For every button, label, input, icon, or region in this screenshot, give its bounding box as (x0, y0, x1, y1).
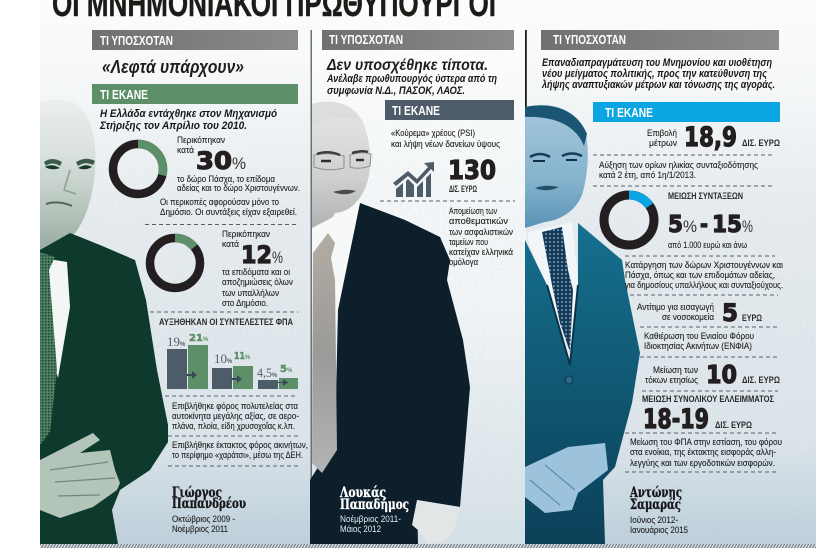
luxury tax note: αυτοκίνητα μεγάλης αξίας, σε αερο- (172, 411, 299, 422)
ENFIA note (644, 331, 754, 352)
icon: rising chart (393, 162, 434, 197)
name: Papandreou: Γιώργος (172, 485, 222, 501)
stat 30 percent: Περικόπηκαν (177, 135, 225, 146)
stat 18.9 billion (647, 122, 780, 153)
luxury tax note (172, 401, 299, 432)
tax cuts note: στα ενοίκια, της έκτακτης εισφοράς αλλη- (630, 447, 776, 458)
stat pension cuts: 5 (668, 212, 683, 238)
stat deficit cut: 18-19 (643, 404, 709, 435)
name: Papandreou: Νοέμβριος 2011 (172, 524, 228, 535)
stat 130 billion: ΔΙΣ. ΕΥΡΩ (449, 183, 477, 194)
stat 12 percent: των υπαλλήλων (222, 288, 279, 299)
promise statement: νέου μείγματος πολιτικής, προς την κατεύθυνση της (542, 68, 767, 80)
stat deficit cut: ΜΕΙΩΣΗ ΣΥΝΟΛΙΚΟΥ ΕΛΛΕΙΜΜΑΤΟΣ (642, 393, 774, 404)
stat 30 percent: κατά (177, 145, 194, 156)
name: Papandreou (172, 485, 246, 535)
property tax note: Επιβλήθηκε έκτακτος φόρος ακινήτων, (172, 440, 308, 451)
luxury tax note: πλάνα, πλοία, είδη χρυσοχοΐας κ.λπ. (172, 421, 295, 432)
pension funds note: των ασφαλιστικών (449, 227, 513, 238)
pension funds note: Απομείωση των (449, 206, 497, 217)
VAT chart heading: ΑΥΞΗΘΗΚΑΝ ΟΙ ΣΥΝΤΕΛΕΣΤΕΣ ΦΠΑ (159, 316, 293, 327)
promise statement: Επαναδιαπραγμάτευση του Μνημονίου και υιοθέτηση (542, 57, 772, 69)
portrait: Antonis Samaras (525, 105, 640, 544)
PSI text (391, 128, 500, 150)
bar chart: VAT rates: % (227, 359, 233, 365)
name: Samaras: Ιούνιος 2012- (630, 515, 678, 526)
promise statement (326, 57, 497, 97)
column rules (310, 30, 527, 544)
did header (92, 84, 298, 104)
stat pension cuts: 15 (712, 212, 742, 238)
name: Papadimos: Μάιος 2012 (340, 524, 381, 535)
bar chart: VAT rates: % (287, 368, 293, 374)
stat 30 percent: Οι περικοπές αφορούσαν μόνο το (160, 197, 279, 208)
stat pension cuts: - (700, 212, 708, 238)
pension funds note: ταμείων που (449, 237, 488, 248)
stat 12 percent: τα επιδόματα και οι (222, 267, 290, 278)
pension funds note: ομόλογα (449, 257, 478, 268)
bar chart: VAT rates: % (180, 342, 186, 348)
bar chart: VAT rates (167, 333, 298, 389)
PSI text: «Κούρεμα» χρέους (PSI) (391, 128, 475, 139)
stat deficit cut (642, 393, 774, 435)
bar chart: VAT rates: 5 (280, 364, 287, 375)
stat pension cuts: από 1.000 ευρώ και άνω (668, 240, 747, 251)
stat 30 percent: αδείας και το δώρο Χριστουγέννων. (177, 183, 300, 194)
bonuses note: Πάσχα, όπως και των επιδομάτων αδείας, (625, 270, 775, 281)
stat interest cut: 10 (706, 360, 737, 389)
name: Papandreou: Οκτώβριος 2009 - (172, 514, 235, 525)
ENFIA note: Ιδιοκτησίας Ακινήτων (ΕΝΦΙΑ) (644, 341, 752, 352)
promise statement: συμφωνία Ν.Δ., ΠΑΣΟΚ, ΛΑΟΣ. (327, 85, 465, 97)
stat hospital fee: Αντίτιμο για εισαγωγή (637, 302, 714, 313)
stat pension cuts: % (742, 217, 753, 236)
portrait: Loukas Papadimos (310, 102, 470, 545)
pension funds note (449, 206, 513, 268)
did header (593, 102, 780, 122)
stat hospital fee: 5 (722, 299, 738, 327)
did header: ΤΙ ΕΚΑΝΕ (392, 104, 440, 118)
bailout statement: Στήριξης τον Απρίλιο του 2010. (99, 120, 247, 132)
name: Samaras (629, 485, 688, 536)
stat interest cut (645, 360, 780, 389)
stat interest cut: Μείωση των (653, 365, 698, 376)
stat 12 percent: % (272, 248, 283, 267)
promised header (541, 30, 779, 50)
stat hospital fee: ΕΥΡΩ (742, 312, 762, 323)
name: Papadimos: Λουκάς (339, 485, 386, 501)
property tax note: το περίφημο «χαράτσι», μέσω της ΔΕΗ. (172, 450, 303, 461)
portrait: Giorgos Papandreou (40, 100, 168, 544)
name: Samaras: Ιανουάριος 2015 (630, 525, 688, 536)
bar chart: VAT rates: 10 (214, 351, 227, 366)
name: Samaras: Σαμαράς (630, 497, 681, 513)
property tax note (172, 440, 308, 461)
did header: ΤΙ ΕΚΑΝΕ (605, 106, 653, 120)
ENFIA note: Καθιέρωση του Ενιαίου Φόρου (644, 331, 754, 342)
bailout statement (99, 108, 277, 132)
name: Papadimos: Νοέμβριος 2011- (340, 514, 401, 525)
stat hospital fee: σε νοσοκομεία (662, 312, 714, 323)
donut 12 percent (150, 238, 200, 288)
bar chart: VAT rates: 4,5 (257, 365, 272, 380)
panel: Samaras column (541, 30, 783, 536)
luxury tax note: Επιβλήθηκε φόρος πολυτελείας στα (172, 401, 298, 412)
pension funds note: κατείχαν ελληνικά (449, 247, 513, 258)
promised header (322, 30, 514, 50)
panel: Papadimos column (322, 30, 515, 268)
retirement age note: Αύξηση των ορίων ηλικίας συνταξιοδότησης (599, 160, 758, 171)
stat 30 percent: Δημόσιο. Οι συντάξεις είχαν εξαιρεθεί. (160, 207, 297, 218)
bar chart: VAT rates: 11 (234, 351, 245, 362)
tax cuts note (630, 437, 782, 469)
stat pension cuts: ΜΕΙΩΣΗ ΣΥΝΤΑΞΕΩΝ (668, 190, 743, 201)
promised header: ΤΙ ΥΠΟΣΧΟΤΑΝ (329, 33, 403, 47)
bailout statement: Η Ελλάδα εντάχθηκε στον Μηχανισμό (100, 108, 277, 120)
stat 12 percent: Περικόπηκαν (222, 229, 270, 240)
promised header (92, 30, 298, 50)
stat 12 percent: κατά (222, 239, 239, 250)
bonuses note (625, 260, 783, 291)
bar chart: VAT rates: % (245, 355, 251, 361)
stat 12 percent: 12 (241, 241, 272, 269)
pension funds note: αποθεματικών (449, 216, 508, 227)
stat interest cut: ΔΙΣ. ΕΥΡΩ (742, 374, 780, 385)
donut pension cuts (604, 195, 654, 245)
retirement age note (599, 160, 758, 181)
stat 30 percent: % (232, 154, 246, 173)
stat 18.9 billion: ΔΙΣ. ΕΥΡΩ (742, 137, 780, 148)
stat 30 percent: το δώρο Πάσχα, το επίδομα (177, 174, 275, 185)
stat 18.9 billion: 18,9 (684, 122, 737, 153)
bar chart: VAT rates: 19 (167, 334, 180, 349)
panel: Papandreou column (92, 30, 308, 535)
stat interest cut: τόκων ετησίως (645, 375, 698, 386)
promised header: ΤΙ ΥΠΟΣΧΟΤΑΝ (553, 33, 626, 47)
stat pension cuts (668, 190, 753, 251)
stat 18.9 billion: Επιβολή (647, 128, 677, 139)
bar chart: VAT rates: 21 (189, 333, 203, 344)
name: Papadimos: Παπαδήμος (340, 497, 409, 513)
tax cuts note: Μείωση του ΦΠΑ στην εστίαση, του φόρου (630, 437, 782, 448)
tax cuts note: λεγγύης και των εργοδοτικών εισφορών. (630, 458, 775, 469)
donut 30 percent (113, 144, 163, 194)
did header: ΤΙ ΕΚΑΝΕ (100, 88, 148, 102)
bar chart: VAT rates: % (272, 373, 278, 379)
stat 12 percent: αποζημιώσεις όλων (222, 277, 293, 288)
stat hospital fee (637, 299, 762, 327)
PSI text: και λήψη νέων δανείων ύψους (391, 139, 500, 150)
bonuses note: Κατάργηση των δώρων Χριστουγέννων και (625, 260, 783, 271)
name: Papadimos (339, 485, 409, 535)
stat 12 percent: στο Δημόσιο. (222, 298, 268, 309)
name: Papandreou: Παπανδρέου (172, 496, 246, 512)
promise statement: Δεν υποσχέθηκε τίποτα. (326, 57, 488, 74)
stat 12 percent (222, 229, 293, 309)
promise quote: «Λεφτά υπάρχουν» (102, 56, 244, 77)
bottom hatched strip (40, 544, 816, 548)
did header (385, 100, 514, 120)
stat 30 percent (160, 135, 300, 218)
name: Samaras: Αντώνης (629, 485, 682, 501)
stat pension cuts: % (683, 217, 697, 236)
bar chart: VAT rates: % (203, 337, 209, 343)
stat 18.9 billion: μέτρων (649, 138, 677, 149)
promise statement (541, 57, 775, 91)
stat 130 billion: 130 (448, 156, 496, 186)
stat 30 percent: 30 (196, 147, 232, 175)
promise statement: Ανέλαβε πρωθυπουργός ύστερα από τη (326, 73, 497, 85)
retirement age note: κατά 2 έτη, από 1η/1/2013. (599, 170, 696, 181)
stat deficit cut: ΔΙΣ. ΕΥΡΩ (715, 419, 752, 430)
promised header: ΤΙ ΥΠΟΣΧΟΤΑΝ (100, 34, 173, 48)
